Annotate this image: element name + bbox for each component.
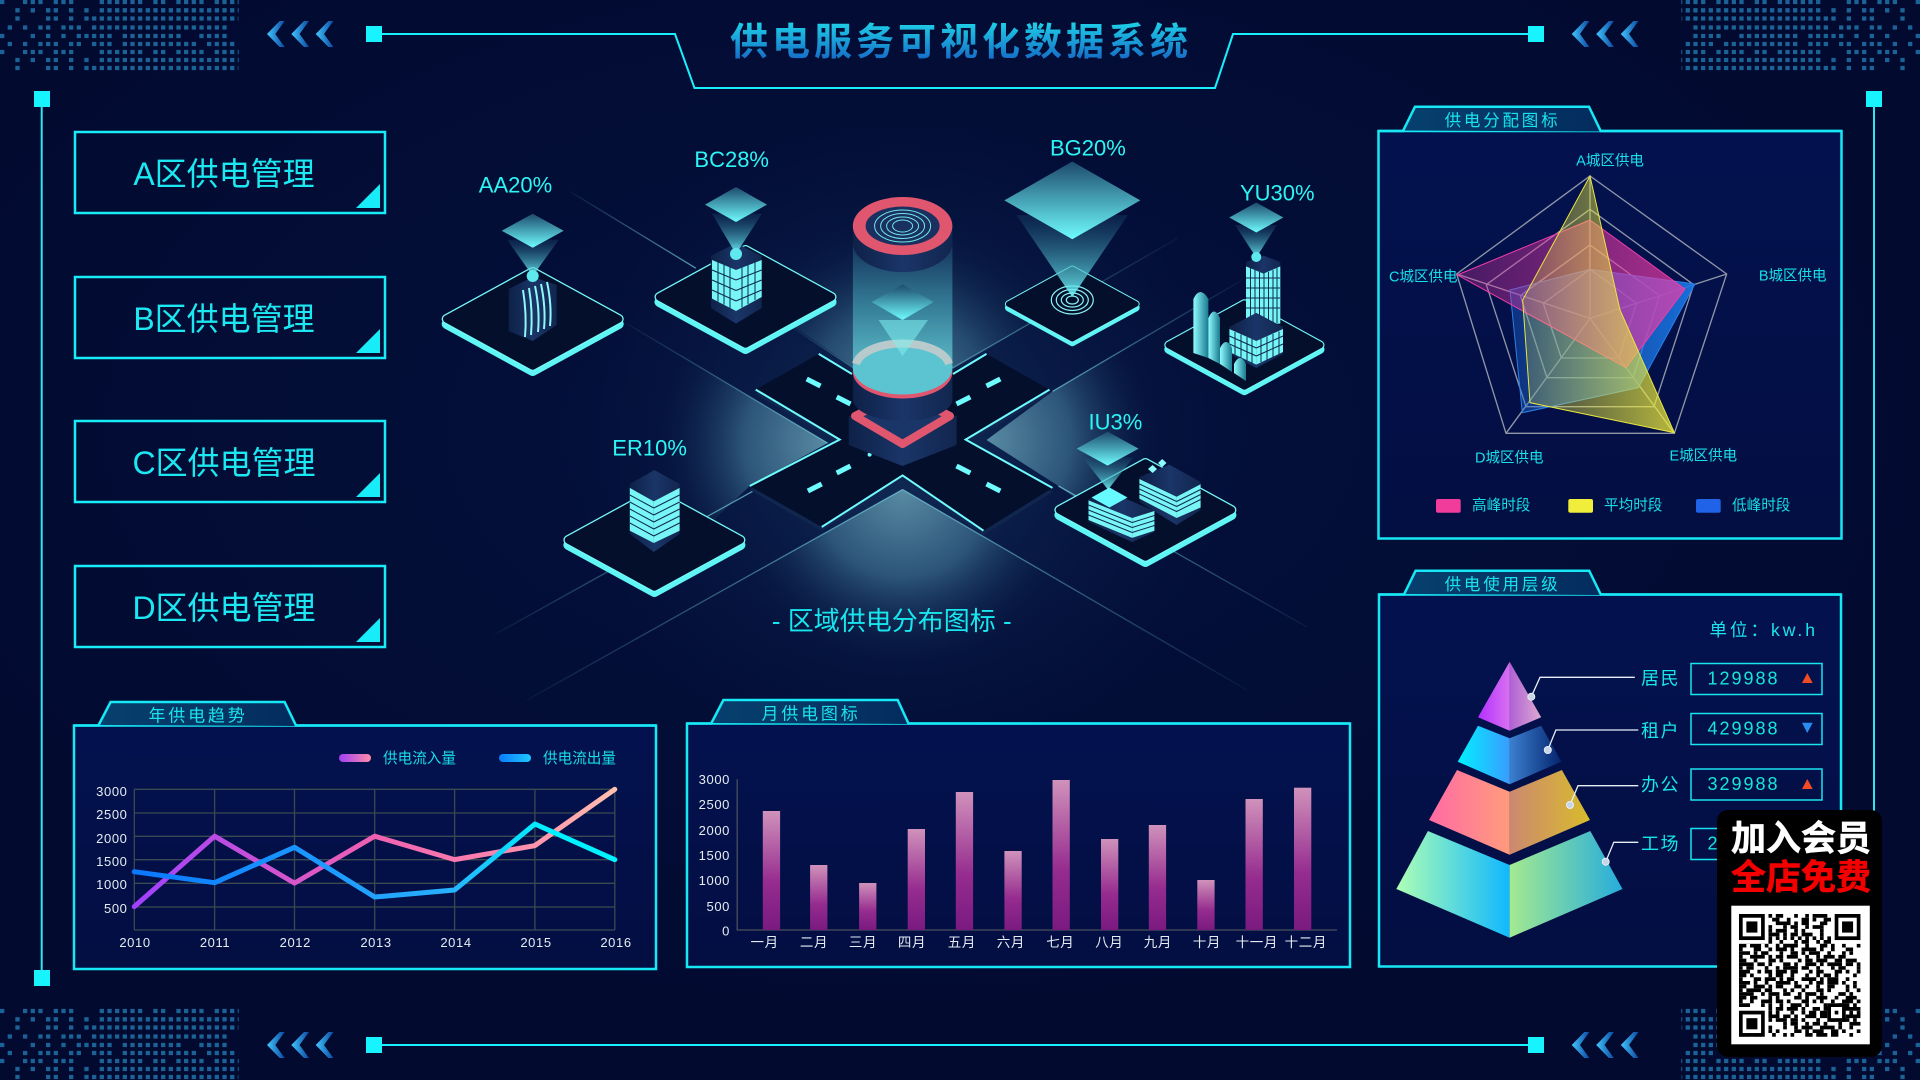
zone AA — [447, 172, 619, 371]
bar chart: 一月 — [750, 935, 779, 950]
bar chart: 十一月 — [1236, 935, 1278, 950]
zone BG: BG20% — [1050, 135, 1126, 160]
row: residents: 129988 — [1708, 668, 1780, 688]
QR code — [1731, 906, 1870, 1044]
pillar top cylinder — [853, 197, 952, 272]
pyramid chart — [1396, 662, 1622, 938]
pillar diamond beam — [872, 284, 934, 356]
side frame left — [34, 91, 50, 986]
line chart: 2014 — [440, 935, 472, 950]
zone AA: AA20% — [479, 172, 552, 198]
radar legend: 高峰时段 — [1472, 497, 1531, 514]
line chart: 500 — [104, 901, 128, 916]
bar chart: 十二月 — [1285, 935, 1327, 950]
bar chart: 2500 — [699, 797, 730, 812]
title: 供电服务可视化数据系统 — [730, 22, 1192, 64]
button: B — [75, 277, 385, 358]
zone ER: ER10% — [612, 435, 687, 460]
heading: 月供电图标 — [762, 704, 860, 724]
line chart: 2011 — [200, 935, 230, 950]
radar legend — [1436, 497, 1791, 514]
radar chart — [1457, 176, 1727, 433]
bar chart: 二月 — [800, 935, 828, 950]
bar chart: 2000 — [699, 823, 730, 838]
bar chart: 三月 — [849, 935, 877, 950]
zone IU — [1059, 409, 1231, 562]
badge text: join member: 加入会员 — [1731, 820, 1871, 858]
central pillar — [849, 197, 957, 466]
bar chart: 0 — [722, 924, 730, 938]
line chart: 1000 — [96, 877, 128, 892]
row: factories: 工场 — [1641, 834, 1680, 854]
zone BC: BC28% — [694, 147, 769, 172]
line chart: 3000 — [96, 784, 128, 799]
zone YU — [1169, 181, 1320, 391]
zone BC — [660, 147, 832, 349]
line chart: 2000 — [96, 831, 128, 846]
button: C: C区供电管理 — [132, 445, 316, 481]
panel: yearly supply trend — [74, 702, 656, 969]
side frame right — [1866, 91, 1882, 986]
panel: usage levels pyramid — [1379, 571, 1841, 966]
central isometric map — [447, 110, 1320, 770]
zone IU: IU3% — [1089, 409, 1142, 434]
button: D: D区供电管理 — [132, 590, 316, 626]
glow areas — [527, 110, 1247, 770]
radar labels: B城区供电 — [1759, 268, 1827, 285]
zone YU: YU30% — [1240, 181, 1315, 206]
button: B: B区供电管理 — [133, 301, 315, 337]
radar labels: C城区供电 — [1389, 269, 1458, 286]
line chart: 2500 — [96, 807, 128, 822]
pillar base — [849, 346, 957, 466]
badge: membership QR — [1717, 810, 1882, 1057]
radar legend: 低峰时段 — [1732, 497, 1791, 514]
legend — [339, 750, 616, 767]
radar labels: A城区供电 — [1576, 153, 1644, 170]
line chart: 2013 — [360, 935, 392, 950]
bar chart: 1500 — [699, 848, 730, 863]
row: factories — [1602, 828, 1822, 865]
line chart: 2015 — [520, 935, 552, 950]
line chart: 2012 — [280, 935, 311, 950]
row: tenants — [1544, 714, 1822, 754]
zone BG — [1004, 135, 1140, 342]
bar chart: 500 — [706, 899, 730, 914]
panel: power distribution radar — [1378, 107, 1842, 538]
line chart: 1500 — [96, 854, 128, 869]
road intersection — [750, 354, 1052, 535]
row: residents — [1528, 664, 1822, 700]
radar labels: E城区供电 — [1669, 448, 1737, 465]
zone ER — [568, 435, 740, 592]
bar chart: 六月 — [997, 935, 1025, 950]
row: tenants: 429988 — [1708, 718, 1780, 738]
row: offices: 办公 — [1641, 775, 1680, 795]
row: tenants: 租户 — [1641, 721, 1680, 741]
bar chart: 七月 — [1046, 935, 1074, 950]
row: offices — [1566, 769, 1822, 808]
map caption: - 区域供电分布图标 - — [772, 606, 1012, 636]
header frame — [366, 26, 1544, 88]
panel: monthly supply — [687, 700, 1350, 967]
row: offices: 329988 — [1708, 774, 1780, 794]
footer line — [366, 1037, 1544, 1053]
heading: 供电使用层级 — [1445, 575, 1560, 594]
bar chart: 3000 — [699, 772, 730, 787]
line chart — [96, 784, 632, 950]
line chart: 2010 — [119, 935, 151, 950]
unit: 单位：kw.h — [1710, 620, 1818, 640]
badge text: store free: 全店免费 — [1731, 858, 1871, 898]
chevrons: top right — [1572, 21, 1638, 47]
bar chart: 九月 — [1144, 935, 1172, 950]
radar legend: 平均时段 — [1604, 497, 1663, 514]
button: D — [75, 566, 385, 647]
button: A — [75, 132, 385, 213]
chevrons: bottom left — [267, 1032, 333, 1058]
bar chart: 十月 — [1193, 935, 1221, 950]
bar chart: 1000 — [699, 873, 730, 888]
bar chart: 五月 — [948, 935, 976, 950]
bar chart — [699, 772, 1337, 950]
bar chart: 四月 — [898, 935, 926, 950]
row: residents: 居民 — [1641, 668, 1680, 688]
chevrons: bottom right — [1572, 1032, 1638, 1058]
bar chart: 八月 — [1095, 935, 1123, 950]
thin diagonal lines — [495, 191, 1307, 700]
chevrons: top left — [267, 21, 333, 47]
radar labels — [1389, 153, 1827, 467]
legend: 供电流出量 — [543, 750, 616, 767]
line chart: 2016 — [600, 935, 632, 950]
heading: 供电分配图标 — [1445, 111, 1560, 130]
pillar glass body — [853, 244, 952, 394]
button: A: A区供电管理 — [133, 156, 315, 192]
heading: 年供电趋势 — [148, 706, 248, 726]
row: factories: 229988 — [1708, 834, 1780, 854]
legend: 供电流入量 — [383, 750, 456, 767]
button: C — [75, 421, 385, 502]
radar labels: D城区供电 — [1475, 450, 1544, 467]
